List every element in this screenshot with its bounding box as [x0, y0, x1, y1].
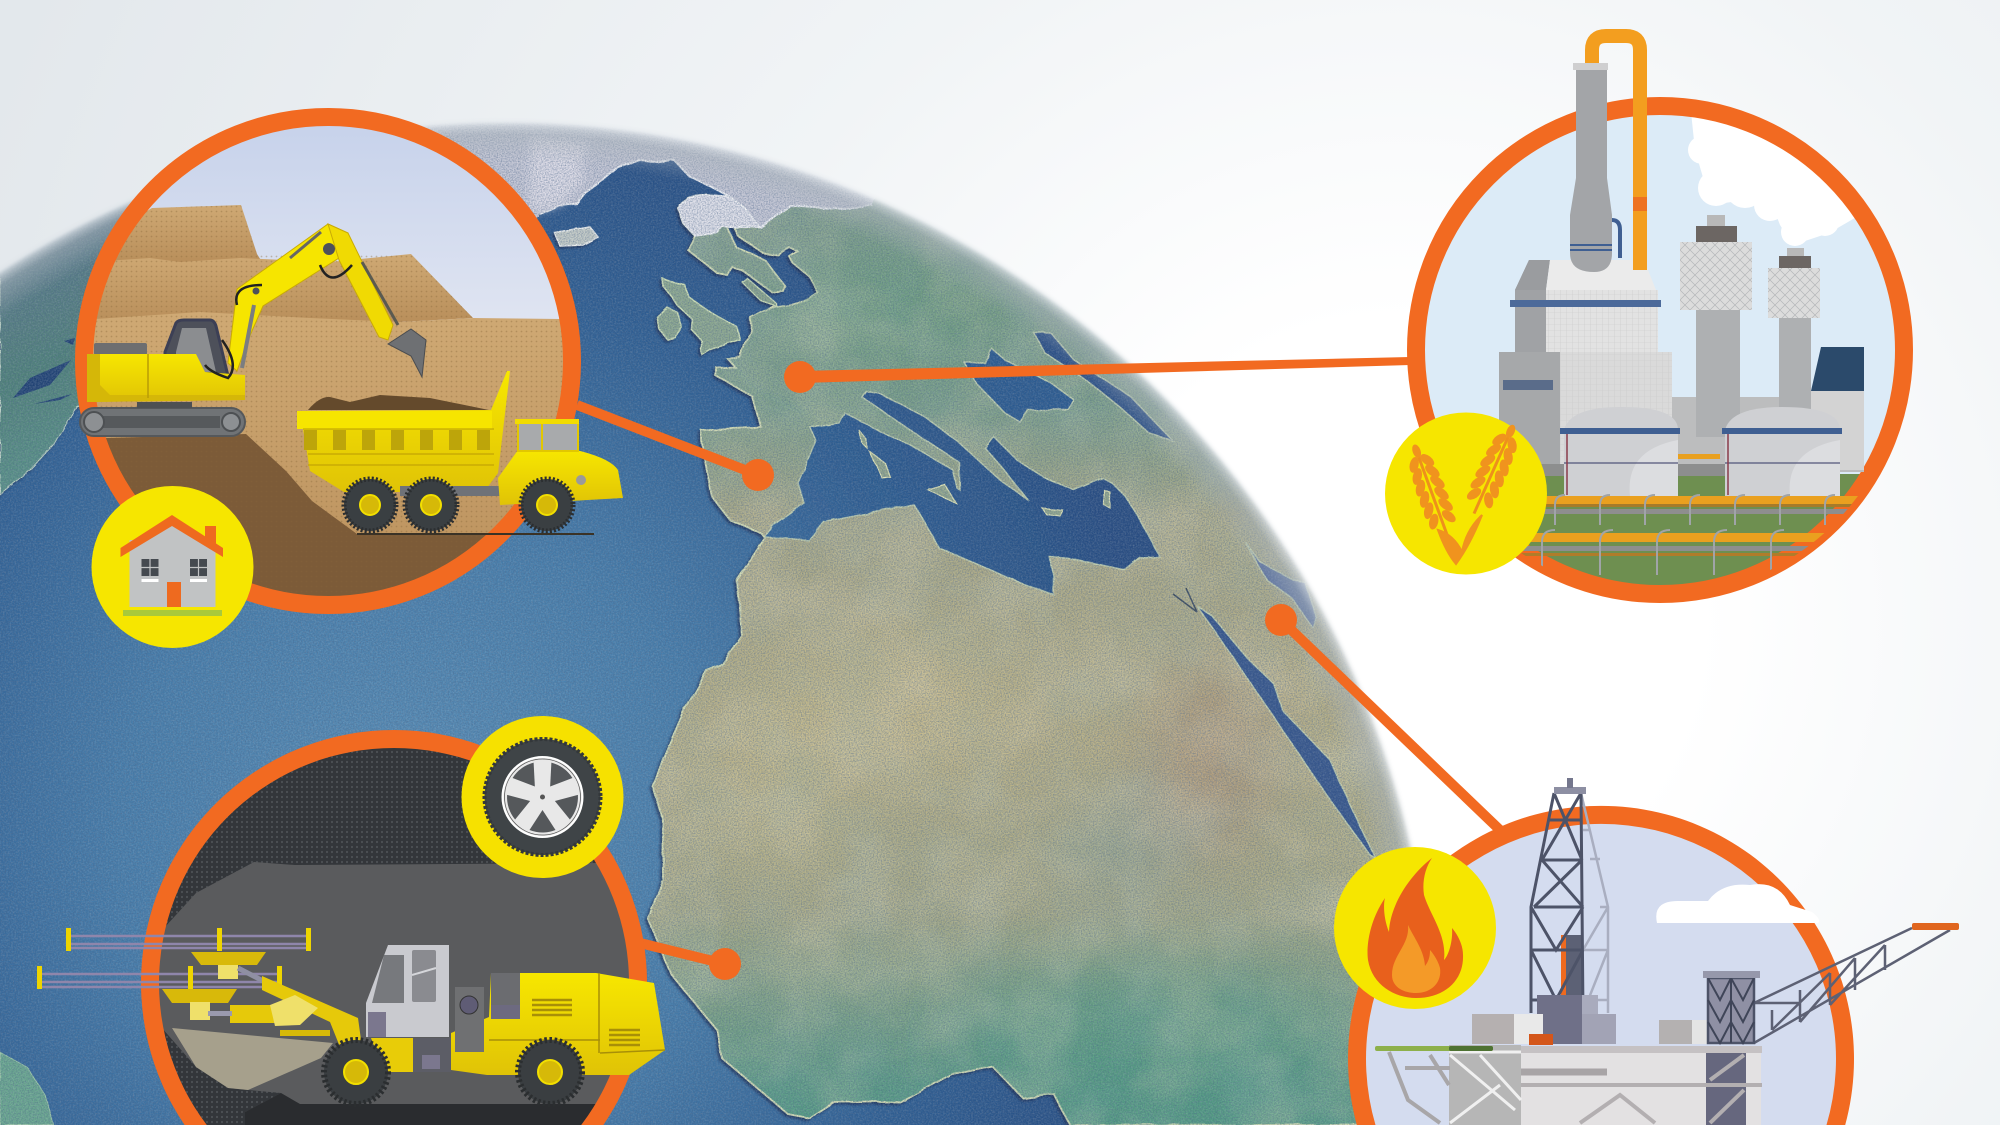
land colour mottling: [640, 190, 1440, 1125]
Iceland: [555, 227, 598, 246]
orange ring: [1348, 806, 1854, 1125]
panel: offshore oil rig: [1334, 778, 1959, 1125]
paper highlights: [0, 100, 1500, 1125]
crane tower and boom: [1703, 923, 1959, 1043]
South America: [0, 1052, 54, 1125]
ice coast highlights: [540, 159, 872, 227]
refinery stack and orange pipe: [1570, 36, 1647, 272]
polar ice over northern land and Greenland: [422, 122, 873, 237]
rift lines above the Red Sea: [1173, 588, 1197, 612]
atmosphere rim: [0, 100, 1500, 1125]
Mediterranean islands: [859, 430, 1110, 516]
panel: open-pit mine: [60, 100, 623, 648]
dump truck: [297, 371, 623, 534]
Persian Gulf: [1245, 542, 1317, 627]
panel: refinery: [1385, 36, 1930, 614]
excavator: [80, 224, 426, 436]
Greenland pale patch: [530, 135, 590, 212]
ice fill: [422, 122, 873, 226]
white Scandinavian ice lobe: [678, 195, 760, 236]
refinery scene background: [1410, 100, 1930, 614]
land masses: [0, 194, 1410, 1125]
badge: house: [92, 486, 254, 648]
badge: wheat: [1385, 412, 1547, 574]
UK: [662, 278, 740, 355]
orange ring: [84, 117, 572, 605]
Ireland: [657, 307, 682, 339]
connector: refinery to France: [784, 357, 1410, 393]
Caspian: [1034, 333, 1172, 440]
refinery plant: [1499, 215, 1920, 575]
cloud: [1656, 884, 1819, 923]
North American inlets: [13, 338, 75, 404]
orange ring: [1416, 106, 1904, 594]
rig deck and superstructure: [1375, 1014, 1762, 1125]
tunnel scene background: [140, 730, 660, 1125]
connector: mine to Spain: [577, 405, 774, 491]
connector: underground mine to West Africa: [640, 943, 741, 980]
derrick: [1531, 778, 1608, 1014]
Eurasia and Africa: [644, 194, 1410, 1125]
rig scene background: [1350, 810, 1855, 1125]
Black Sea: [965, 348, 1074, 422]
drilling machine: [37, 928, 665, 1104]
mine scene background: [60, 100, 600, 620]
Red Sea: [1197, 606, 1375, 857]
connector: oil rig to Arabia: [1265, 604, 1502, 832]
paper texture: [0, 100, 1500, 1125]
Denmark: [742, 278, 777, 307]
panel: underground mine: [37, 716, 665, 1125]
connector lines and pins: [577, 357, 1502, 980]
badge: tyre: [462, 716, 624, 878]
Mediterranean: [764, 391, 1160, 595]
globe: [0, 122, 1413, 1125]
badge: flame: [1334, 847, 1496, 1009]
North America: [0, 180, 200, 494]
orange ring: [141, 730, 647, 1125]
inland seas: [764, 333, 1375, 857]
